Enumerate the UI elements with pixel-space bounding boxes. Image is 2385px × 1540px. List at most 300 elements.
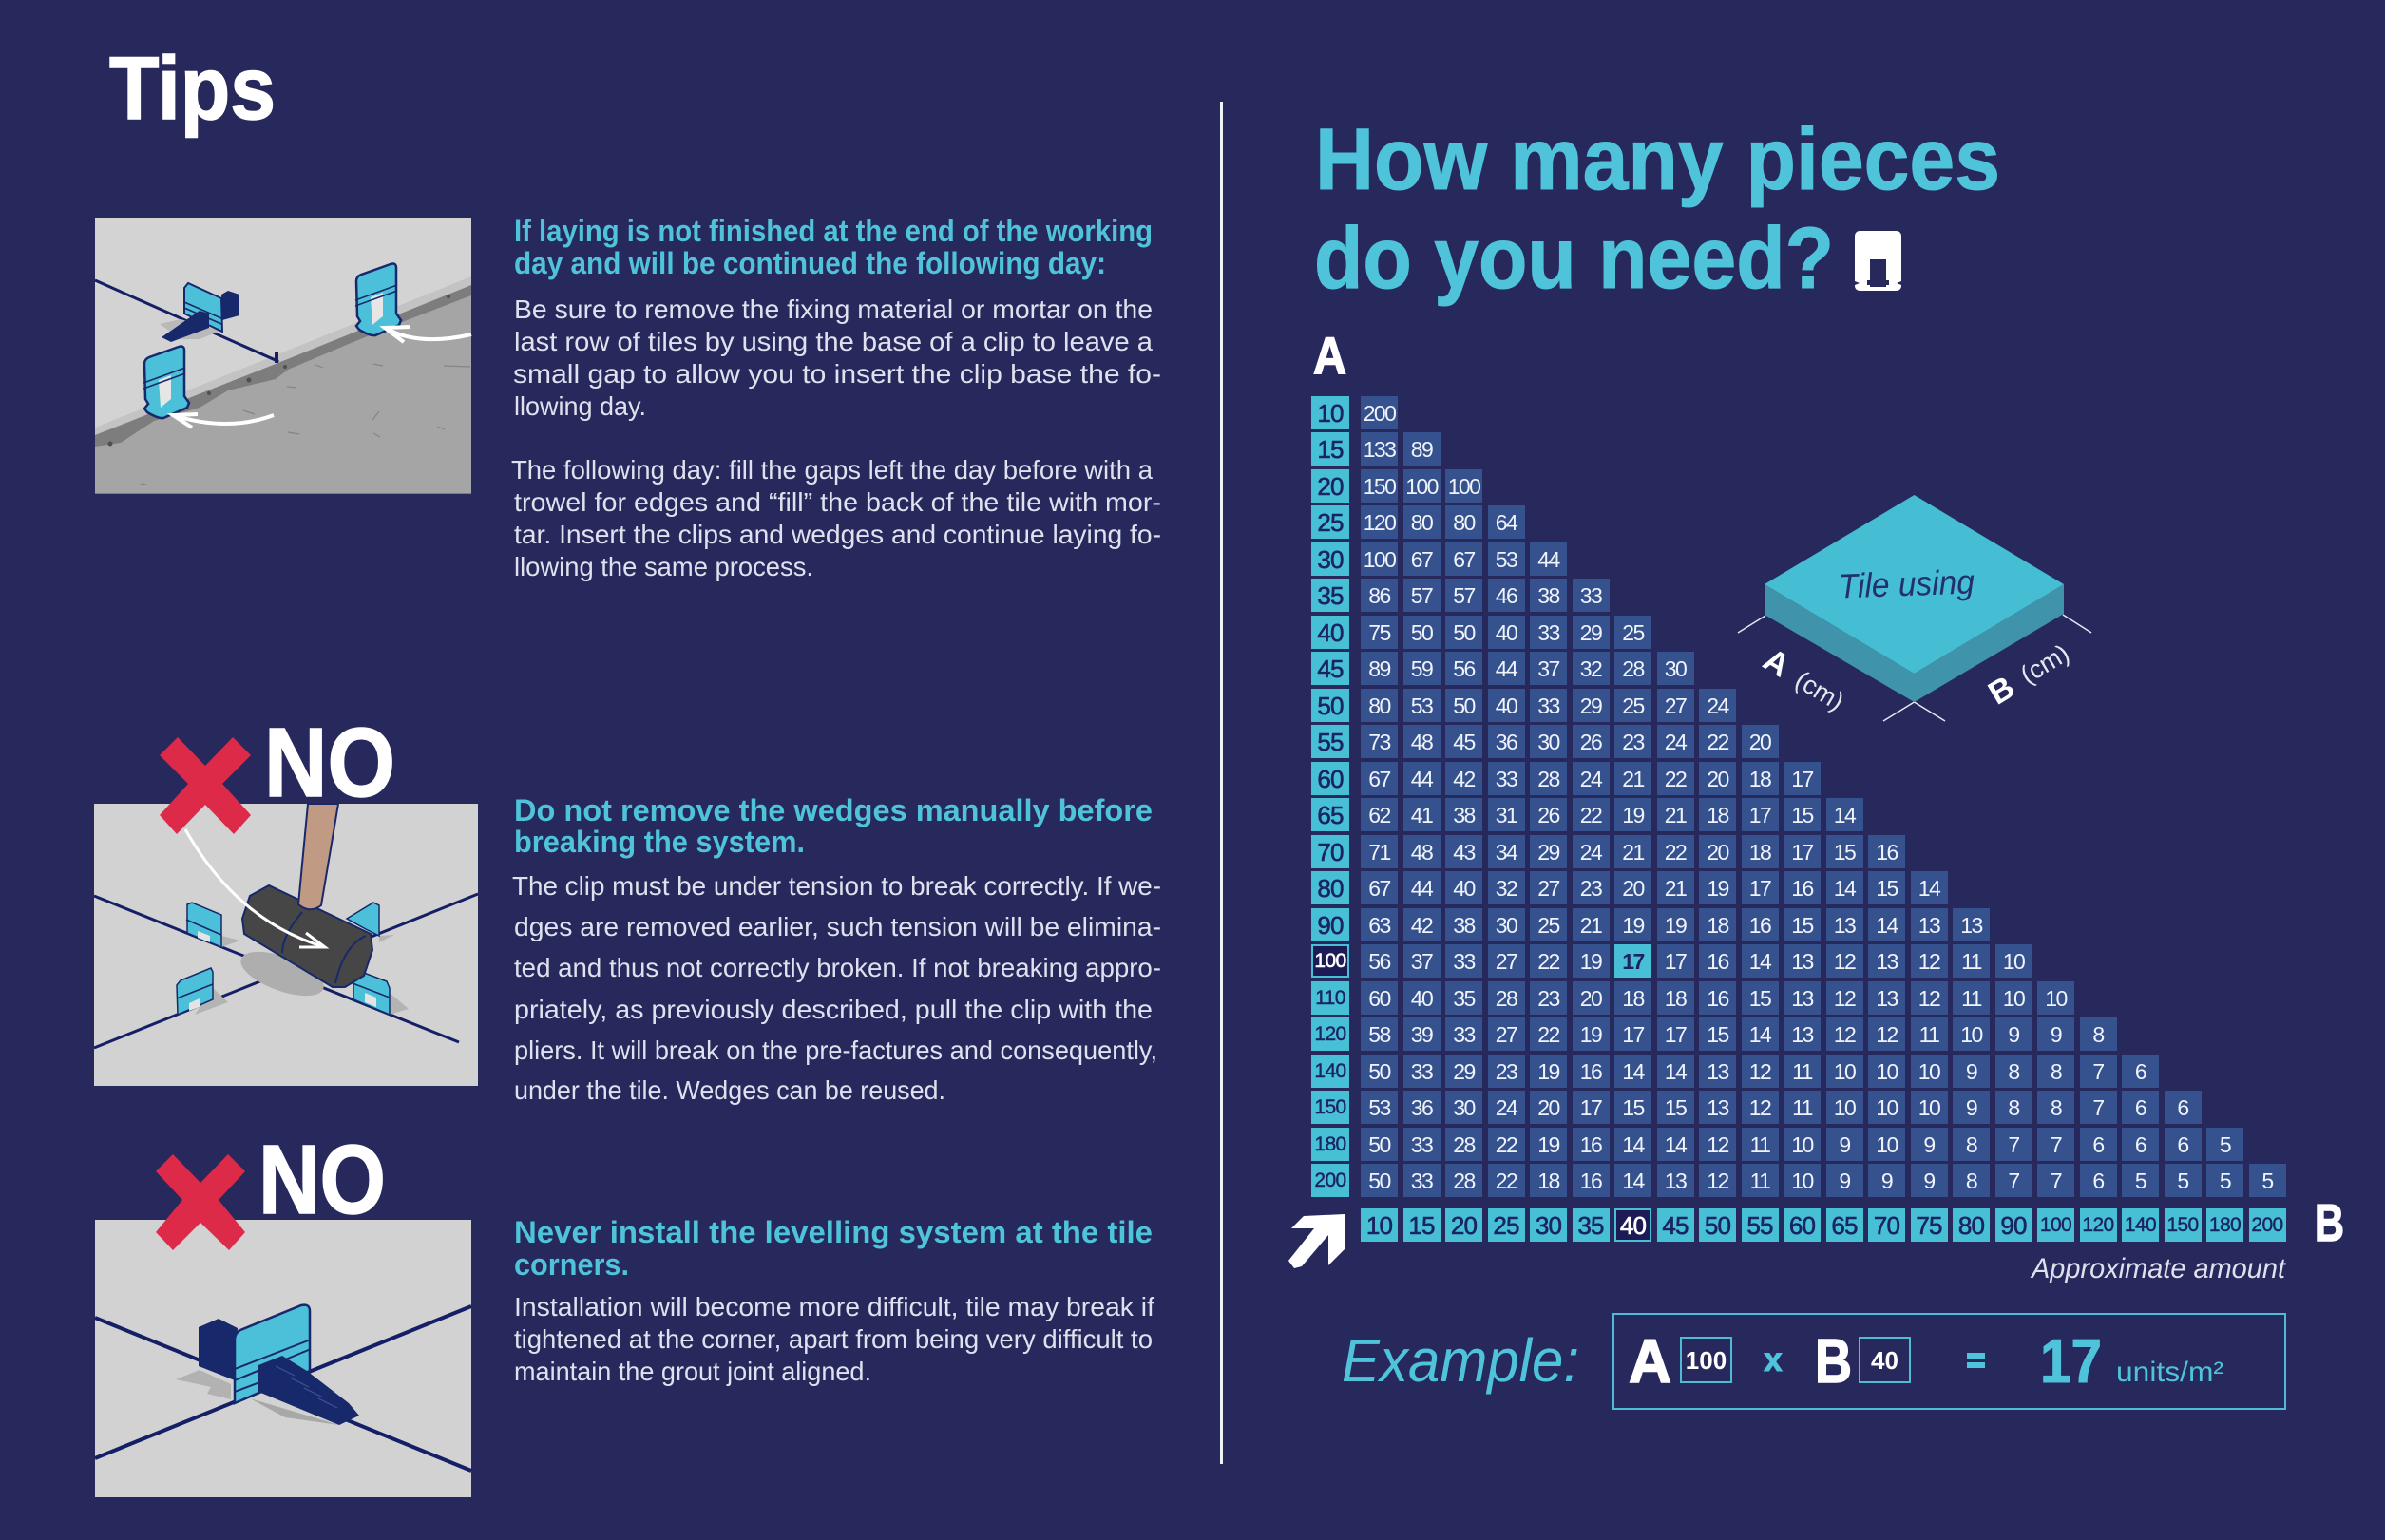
example formula box bbox=[1613, 1314, 2285, 1409]
row A=120: 22 bbox=[1537, 1022, 1559, 1047]
row A=65 bbox=[1311, 798, 1863, 831]
note: Approximate amount: Approximate amount bbox=[2030, 1253, 2287, 1284]
row A=110: 12 bbox=[1918, 986, 1939, 1011]
row A=150: 17 bbox=[1580, 1095, 1601, 1120]
row A=80: 27 bbox=[1537, 876, 1559, 901]
row A=70: 15 bbox=[1834, 840, 1855, 865]
row A=200: 18 bbox=[1537, 1169, 1559, 1193]
row A=100 highlighted: 10 bbox=[2003, 949, 2024, 974]
row A=25 bbox=[1311, 505, 1525, 539]
panel: illustration of unfinished laying bbox=[95, 218, 471, 494]
row A=30 bbox=[1311, 542, 1567, 576]
row A=25: 120 bbox=[1364, 510, 1395, 535]
row A=65: 18 bbox=[1707, 803, 1728, 827]
icon: clip base left bbox=[143, 346, 189, 418]
row A=45: 30 bbox=[1665, 656, 1686, 681]
row A=100 highlighted bbox=[1311, 944, 2032, 978]
row A=35: 46 bbox=[1496, 583, 1517, 608]
row A=60: 24 bbox=[1580, 766, 1601, 790]
text block: wedge removal warning: priately, as previously described, pull the clip with the bbox=[514, 995, 1153, 1024]
row A=90: 30 bbox=[1496, 912, 1517, 937]
row A=200: 10 bbox=[1791, 1169, 1813, 1193]
row A=200: 16 bbox=[1580, 1169, 1601, 1193]
text block: corner warning: tightened at the corner, apart from being very difficult to bbox=[514, 1324, 1153, 1354]
row A=180: 22 bbox=[1496, 1132, 1517, 1157]
row A=60: 17 bbox=[1791, 766, 1813, 790]
row A=25: 80 bbox=[1453, 510, 1475, 535]
text block: wedge removal warning: Do not remove the wedges manually before bbox=[514, 793, 1153, 827]
row A=65: 21 bbox=[1665, 803, 1686, 827]
row A=80 bbox=[1311, 871, 1948, 904]
row A=110: 20 bbox=[1580, 986, 1601, 1011]
divider between left and right halves bbox=[1220, 102, 1223, 1464]
row A=180: 7 bbox=[2008, 1132, 2019, 1157]
row A=80: 19 bbox=[1707, 876, 1728, 901]
axis B values row: 70 bbox=[1874, 1211, 1899, 1240]
row A=180: 33 bbox=[1411, 1132, 1432, 1157]
text block: unfinished laying tip bbox=[511, 214, 1161, 581]
row A=150: 8 bbox=[2008, 1095, 2019, 1120]
row A=120: 33 bbox=[1453, 1022, 1475, 1047]
row A=55: 20 bbox=[1749, 730, 1770, 754]
row A=140: 23 bbox=[1496, 1058, 1517, 1083]
icon: clip bottom right bbox=[353, 969, 390, 1015]
row A=140: 7 bbox=[2092, 1058, 2104, 1083]
row A=50: 50 bbox=[1453, 694, 1475, 718]
row A=55: 23 bbox=[1622, 730, 1644, 754]
icon: clip and wedge at corner bbox=[199, 1305, 359, 1425]
row A=150: 10 bbox=[1876, 1095, 1898, 1120]
row A=90: 25 bbox=[1537, 912, 1559, 937]
row A=140: 8 bbox=[2008, 1058, 2019, 1083]
row A=150: 10 bbox=[1918, 1095, 1939, 1120]
row A=25: 80 bbox=[1411, 510, 1432, 535]
arrow: left curved white arrow bbox=[173, 414, 274, 428]
row A=200: 5 bbox=[2220, 1169, 2230, 1193]
row A=100 highlighted: 17 bbox=[1665, 949, 1686, 974]
row A=35: 57 bbox=[1453, 583, 1475, 608]
axis B values row: 60 bbox=[1789, 1211, 1815, 1240]
row A=150: 10 bbox=[1834, 1095, 1855, 1120]
row A=70: 29 bbox=[1537, 840, 1559, 865]
row A=35: 35 bbox=[1317, 581, 1344, 610]
axis B values row: 120 bbox=[2082, 1214, 2114, 1236]
row A=90: 18 bbox=[1707, 912, 1728, 937]
row A=150: 53 bbox=[1368, 1095, 1390, 1120]
row A=140: 140 bbox=[1314, 1060, 1346, 1081]
row A=140: 6 bbox=[2135, 1058, 2146, 1083]
row A=60: 21 bbox=[1622, 766, 1644, 790]
row A=180: 28 bbox=[1453, 1132, 1475, 1157]
row A=20 bbox=[1311, 469, 1482, 503]
row A=70: 48 bbox=[1411, 840, 1432, 865]
row A=15: 15 bbox=[1317, 435, 1344, 464]
row A=70: 43 bbox=[1453, 840, 1475, 865]
row A=55: 36 bbox=[1496, 730, 1517, 754]
row A=90: 63 bbox=[1368, 912, 1390, 937]
row A=30: 67 bbox=[1453, 547, 1475, 572]
row A=40: 29 bbox=[1580, 619, 1601, 644]
row A=70: 21 bbox=[1622, 840, 1644, 865]
row A=120: 12 bbox=[1876, 1022, 1898, 1047]
row A=100 highlighted: 22 bbox=[1537, 949, 1559, 974]
row A=25: 64 bbox=[1496, 510, 1517, 535]
row A=55: 48 bbox=[1411, 730, 1432, 754]
row A=65: 15 bbox=[1791, 803, 1813, 827]
row A=110: 23 bbox=[1537, 986, 1559, 1011]
row A=80: 20 bbox=[1622, 876, 1644, 901]
row A=35: 38 bbox=[1537, 583, 1559, 608]
axis label: A: A bbox=[1313, 326, 1346, 385]
row A=50: 80 bbox=[1368, 694, 1390, 718]
row A=200: 5 bbox=[2261, 1169, 2273, 1193]
row A=80: 16 bbox=[1791, 876, 1813, 901]
row A=45: 32 bbox=[1580, 656, 1601, 681]
row A=180: 180 bbox=[1314, 1132, 1346, 1155]
row A=150: 6 bbox=[2135, 1095, 2146, 1120]
row A=100 highlighted: 12 bbox=[1918, 949, 1939, 974]
row A=80: 21 bbox=[1665, 876, 1686, 901]
example formula box: x bbox=[1764, 1341, 1783, 1378]
icon: red cross 1 bbox=[160, 737, 251, 834]
row A=200: 5 bbox=[2135, 1169, 2146, 1193]
icon: white corner arrow bbox=[1288, 1214, 1345, 1268]
row A=180: 50 bbox=[1368, 1132, 1390, 1157]
row A=120: 12 bbox=[1834, 1022, 1855, 1047]
row A=15: 89 bbox=[1411, 437, 1432, 462]
row A=110: 40 bbox=[1411, 986, 1432, 1011]
row A=120: 9 bbox=[2008, 1022, 2019, 1047]
icon: clip base right bbox=[355, 264, 401, 335]
label: A (cm) bbox=[1757, 641, 1849, 716]
row A=40: 50 bbox=[1453, 619, 1475, 644]
row A=100 highlighted: 13 bbox=[1791, 949, 1813, 974]
row A=40: 75 bbox=[1368, 619, 1390, 644]
label: B (cm) bbox=[1982, 638, 2074, 712]
row A=110: 35 bbox=[1453, 986, 1475, 1011]
row A=140: 13 bbox=[1707, 1058, 1728, 1083]
row A=15 bbox=[1311, 432, 1441, 466]
row A=150: 7 bbox=[2092, 1095, 2104, 1120]
row A=180: 8 bbox=[1966, 1132, 1976, 1157]
axis B values row: 90 bbox=[2000, 1211, 2027, 1240]
row A=60: 67 bbox=[1368, 766, 1390, 790]
row A=120: 58 bbox=[1368, 1022, 1390, 1047]
row A=10 bbox=[1311, 396, 1398, 429]
row A=100 highlighted: 13 bbox=[1876, 949, 1898, 974]
row A=120: 120 bbox=[1314, 1023, 1346, 1045]
text block: unfinished laying tip: day and will be continued the following day: bbox=[514, 246, 1106, 280]
row A=200: 13 bbox=[1665, 1169, 1686, 1193]
row A=100 highlighted: 11 bbox=[1961, 949, 1981, 974]
row A=110: 28 bbox=[1496, 986, 1517, 1011]
row A=100 highlighted: 17 bbox=[1622, 949, 1644, 974]
heading: How many pieces do you need?: do you need? bbox=[1314, 210, 1834, 307]
row A=90: 19 bbox=[1665, 912, 1686, 937]
icon: white clip bbox=[1855, 231, 1901, 291]
row A=55: 26 bbox=[1580, 730, 1601, 754]
text block: unfinished laying tip: trowel for edges and “fill” the back of the tile with mor- bbox=[514, 487, 1161, 517]
example formula box: A bbox=[1629, 1326, 1671, 1396]
row A=110 bbox=[1311, 981, 2074, 1015]
row A=150: 15 bbox=[1665, 1095, 1686, 1120]
row A=150: 13 bbox=[1707, 1095, 1728, 1120]
row A=50: 29 bbox=[1580, 694, 1601, 718]
row A=80: 80 bbox=[1317, 874, 1344, 903]
row A=150: 12 bbox=[1749, 1095, 1770, 1120]
row A=80: 40 bbox=[1453, 876, 1475, 901]
row A=40: 40 bbox=[1317, 618, 1344, 646]
row A=200: 11 bbox=[1750, 1169, 1769, 1193]
row A=120: 27 bbox=[1496, 1022, 1517, 1047]
row A=200: 8 bbox=[1966, 1169, 1976, 1193]
row A=60: 33 bbox=[1496, 766, 1517, 790]
row A=40 bbox=[1311, 616, 1651, 649]
row A=120 bbox=[1311, 1017, 2117, 1051]
icon: clip top right bbox=[347, 903, 379, 936]
row A=10: 200 bbox=[1364, 401, 1395, 426]
row A=150: 9 bbox=[1966, 1095, 1976, 1120]
row A=140: 14 bbox=[1622, 1058, 1644, 1083]
row A=200: 12 bbox=[1707, 1169, 1728, 1193]
text block: wedge removal warning: dges are removed earlier, such tension will be elimina- bbox=[514, 912, 1161, 941]
row A=110: 18 bbox=[1622, 986, 1644, 1011]
row A=100 highlighted: 12 bbox=[1834, 949, 1855, 974]
axis B values row: 15 bbox=[1408, 1211, 1435, 1240]
row A=55: 22 bbox=[1707, 730, 1728, 754]
row A=25: 25 bbox=[1317, 508, 1344, 537]
row A=110: 13 bbox=[1876, 986, 1898, 1011]
row A=50: 33 bbox=[1537, 694, 1559, 718]
row A=20: 100 bbox=[1448, 473, 1479, 498]
text block: wedge removal warning: pliers. It will break on the pre-factures and consequently, bbox=[514, 1036, 1157, 1065]
axis B values row: 45 bbox=[1662, 1211, 1689, 1240]
row A=180: 9 bbox=[1923, 1132, 1935, 1157]
text block: corner warning: maintain the grout joint aligned. bbox=[514, 1357, 871, 1386]
text block: unfinished laying tip: llowing the same process. bbox=[514, 552, 813, 581]
row A=110: 60 bbox=[1368, 986, 1390, 1011]
row A=100 highlighted: 19 bbox=[1580, 949, 1601, 974]
icon: clip bottom left bbox=[177, 968, 213, 1015]
text block: unfinished laying tip: tar. Insert the clips and wedges and continue laying fo- bbox=[514, 520, 1161, 549]
label: Tile using: Tile using bbox=[1838, 562, 1975, 605]
text block: unfinished laying tip: last row of tiles by using the base of a clip to leave a bbox=[514, 327, 1153, 356]
row A=60: 20 bbox=[1707, 766, 1728, 790]
row A=55: 30 bbox=[1537, 730, 1559, 754]
row A=100 highlighted: 33 bbox=[1453, 949, 1475, 974]
axis B values row: 200 bbox=[2251, 1214, 2283, 1236]
row A=200: 9 bbox=[1881, 1169, 1892, 1193]
axis B values row: 75 bbox=[1916, 1211, 1942, 1240]
row A=55: 73 bbox=[1368, 730, 1390, 754]
row A=65: 26 bbox=[1537, 803, 1559, 827]
icon: clip with wedge bbox=[162, 283, 239, 342]
row A=40: 50 bbox=[1411, 619, 1432, 644]
text block: unfinished laying tip: If laying is not finished at the end of the working bbox=[514, 214, 1153, 248]
row A=100 highlighted: 56 bbox=[1368, 949, 1390, 974]
row A=65: 38 bbox=[1453, 803, 1475, 827]
row A=45 bbox=[1311, 652, 1694, 685]
axis B values row: 180 bbox=[2209, 1214, 2241, 1236]
row A=140 bbox=[1311, 1055, 2159, 1088]
row A=30: 44 bbox=[1537, 547, 1559, 572]
row A=90 bbox=[1311, 908, 1990, 941]
row A=140: 12 bbox=[1749, 1058, 1770, 1083]
row A=30: 53 bbox=[1496, 547, 1517, 572]
label: NO 2: NO bbox=[258, 1125, 386, 1234]
row A=80: 14 bbox=[1918, 876, 1939, 901]
row A=45: 37 bbox=[1537, 656, 1559, 681]
row A=200: 200 bbox=[1314, 1169, 1346, 1191]
row A=120: 9 bbox=[2051, 1022, 2061, 1047]
example formula box: 100 bbox=[1686, 1346, 1727, 1375]
row A=40: 33 bbox=[1537, 619, 1559, 644]
row A=200: 14 bbox=[1622, 1169, 1644, 1193]
row A=50: 40 bbox=[1496, 694, 1517, 718]
row A=180: 6 bbox=[2177, 1132, 2188, 1157]
row A=45: 89 bbox=[1368, 656, 1390, 681]
heading: Tips: Tips bbox=[109, 38, 276, 138]
row A=120: 8 bbox=[2092, 1022, 2104, 1047]
axis B values row: 35 bbox=[1577, 1211, 1604, 1240]
row A=20: 20 bbox=[1317, 471, 1344, 500]
row A=55: 24 bbox=[1665, 730, 1686, 754]
row A=90: 14 bbox=[1876, 912, 1898, 937]
row A=60: 60 bbox=[1317, 764, 1344, 792]
row A=60: 44 bbox=[1411, 766, 1432, 790]
row A=45: 56 bbox=[1453, 656, 1475, 681]
row A=60: 28 bbox=[1537, 766, 1559, 790]
row A=180: 7 bbox=[2051, 1132, 2061, 1157]
row A=90: 13 bbox=[1918, 912, 1939, 937]
row A=180: 14 bbox=[1665, 1132, 1686, 1157]
axis B values row: 150 bbox=[2166, 1214, 2199, 1236]
row A=30: 67 bbox=[1411, 547, 1432, 572]
row A=90: 38 bbox=[1453, 912, 1475, 937]
row A=140: 10 bbox=[1918, 1058, 1939, 1083]
row A=65: 19 bbox=[1622, 803, 1644, 827]
row A=15: 133 bbox=[1364, 437, 1395, 462]
row A=200: 22 bbox=[1496, 1169, 1517, 1193]
row A=180: 11 bbox=[1750, 1132, 1769, 1157]
row A=120: 14 bbox=[1749, 1022, 1770, 1047]
axis B values row: 25 bbox=[1493, 1211, 1519, 1240]
row A=180: 16 bbox=[1580, 1132, 1601, 1157]
row A=150 bbox=[1311, 1091, 2202, 1124]
text block: wedge removal warning: breaking the system. bbox=[514, 825, 805, 859]
row A=120: 39 bbox=[1411, 1022, 1432, 1047]
row A=120: 11 bbox=[1919, 1022, 1938, 1047]
example formula box: 40 bbox=[1871, 1346, 1898, 1375]
row A=150: 11 bbox=[1792, 1095, 1812, 1120]
axis B values row: 30 bbox=[1536, 1211, 1561, 1240]
row A=140: 29 bbox=[1453, 1058, 1475, 1083]
row A=100 highlighted: 100 bbox=[1314, 950, 1346, 972]
row A=140: 10 bbox=[1876, 1058, 1898, 1083]
label: NO 1: NO bbox=[264, 708, 395, 817]
row A=65: 31 bbox=[1496, 803, 1517, 827]
row A=110: 13 bbox=[1791, 986, 1813, 1011]
row A=150: 15 bbox=[1622, 1095, 1644, 1120]
row A=50: 25 bbox=[1622, 694, 1644, 718]
row A=120: 17 bbox=[1665, 1022, 1686, 1047]
row A=110: 16 bbox=[1707, 986, 1728, 1011]
row A=55 bbox=[1311, 725, 1779, 758]
text block: wedge removal warning bbox=[512, 793, 1161, 1105]
axis label: B: B bbox=[2315, 1193, 2344, 1252]
row A=45: 44 bbox=[1496, 656, 1517, 681]
row A=140: 50 bbox=[1368, 1058, 1390, 1083]
row A=45: 45 bbox=[1317, 655, 1344, 683]
row A=200: 7 bbox=[2051, 1169, 2061, 1193]
row A=100 highlighted: 16 bbox=[1707, 949, 1728, 974]
row A=90: 15 bbox=[1791, 912, 1813, 937]
row A=100 highlighted: 37 bbox=[1411, 949, 1432, 974]
row A=80: 32 bbox=[1496, 876, 1517, 901]
row A=35: 86 bbox=[1368, 583, 1390, 608]
row A=180: 10 bbox=[1876, 1132, 1898, 1157]
text block: unfinished laying tip: Be sure to remove the fixing material or mortar on the bbox=[514, 295, 1153, 324]
row A=60: 22 bbox=[1665, 766, 1686, 790]
axis B values row: 140 bbox=[2125, 1214, 2156, 1236]
axis B values row: 55 bbox=[1746, 1211, 1773, 1240]
row A=140: 8 bbox=[2051, 1058, 2061, 1083]
example formula box: B bbox=[1815, 1326, 1852, 1396]
row A=40: 40 bbox=[1496, 619, 1517, 644]
row A=150: 20 bbox=[1537, 1095, 1559, 1120]
row A=70: 17 bbox=[1791, 840, 1813, 865]
row A=40: 25 bbox=[1622, 619, 1644, 644]
text block: unfinished laying tip: llowing day. bbox=[514, 391, 646, 421]
row A=50: 50 bbox=[1317, 692, 1344, 720]
axis B values row bbox=[1361, 1208, 2286, 1242]
row A=120: 10 bbox=[1960, 1022, 1982, 1047]
text block: unfinished laying tip: The following day: fill the gaps left the day before with a bbox=[511, 455, 1153, 485]
row A=180: 9 bbox=[1839, 1132, 1850, 1157]
row A=50: 27 bbox=[1665, 694, 1686, 718]
label: A (cm): (cm) bbox=[1790, 665, 1849, 716]
row A=90: 90 bbox=[1317, 910, 1344, 939]
row A=200: 33 bbox=[1411, 1169, 1432, 1193]
row A=120: 15 bbox=[1707, 1022, 1728, 1047]
row A=200: 7 bbox=[2008, 1169, 2019, 1193]
row A=70: 20 bbox=[1707, 840, 1728, 865]
icon: red cross 2 bbox=[156, 1154, 245, 1250]
example formula box: 17 bbox=[2040, 1326, 2102, 1396]
row A=60: 42 bbox=[1453, 766, 1475, 790]
example formula box: units/m² bbox=[2116, 1357, 2223, 1388]
row A=120: 13 bbox=[1791, 1022, 1813, 1047]
axis B values row: 100 bbox=[2040, 1214, 2071, 1236]
row A=110: 18 bbox=[1665, 986, 1686, 1011]
label: B (cm): B bbox=[1982, 669, 2021, 712]
row A=45: 28 bbox=[1622, 656, 1644, 681]
row A=70: 24 bbox=[1580, 840, 1601, 865]
row A=70: 22 bbox=[1665, 840, 1686, 865]
row A=120: 19 bbox=[1580, 1022, 1601, 1047]
row A=200: 9 bbox=[1839, 1169, 1850, 1193]
text block: wedge removal warning: The clip must be under tension to break correctly. If we- bbox=[512, 871, 1161, 901]
row A=110: 11 bbox=[1961, 986, 1981, 1011]
row A=180 bbox=[1311, 1128, 2243, 1161]
axis B values row: 20 bbox=[1451, 1211, 1477, 1240]
row A=70: 34 bbox=[1496, 840, 1517, 865]
row A=60 bbox=[1311, 762, 1821, 795]
text block: corner warning: corners. bbox=[514, 1247, 629, 1282]
row A=90: 16 bbox=[1749, 912, 1770, 937]
row A=90: 42 bbox=[1411, 912, 1432, 937]
row A=80: 15 bbox=[1876, 876, 1898, 901]
